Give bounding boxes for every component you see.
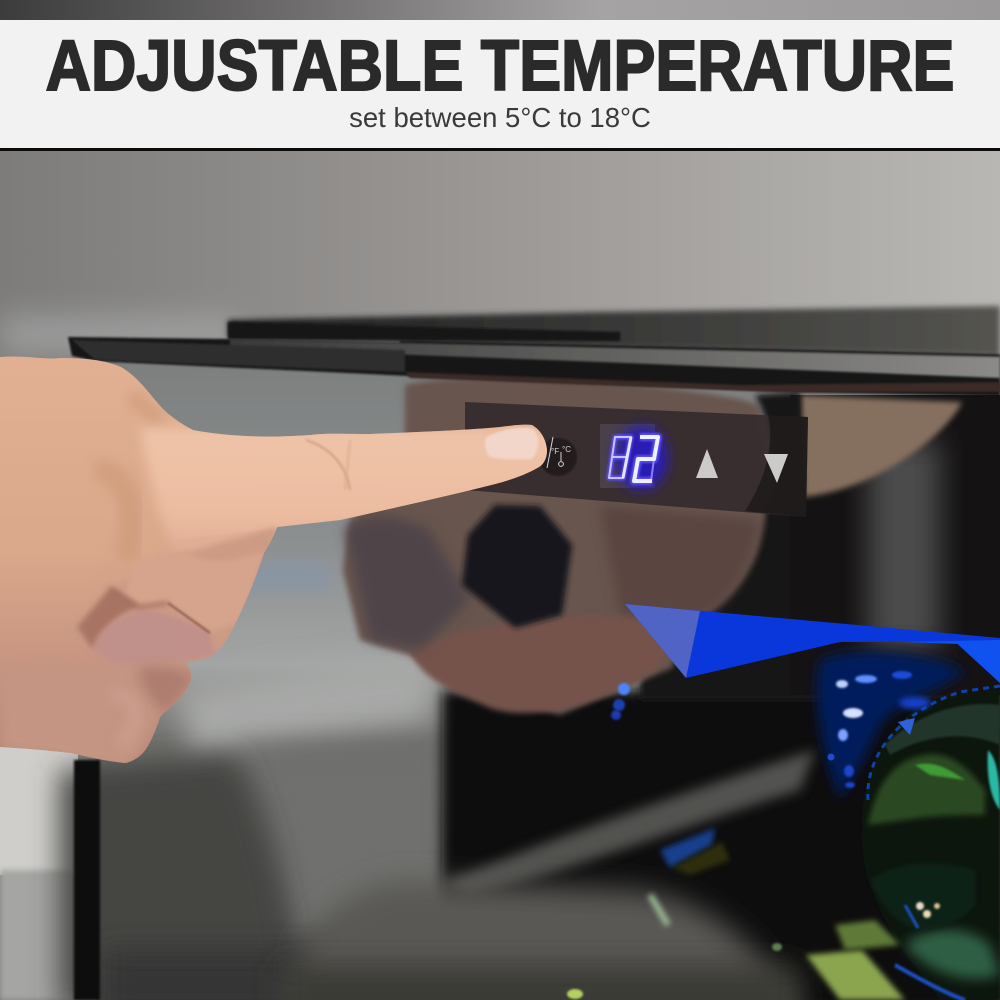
top door trim xyxy=(68,306,1000,396)
palm shadow xyxy=(70,560,110,640)
fingernail xyxy=(485,428,539,459)
subtitle: set between 5°C to 18°C xyxy=(349,102,651,133)
folded fingers xyxy=(77,527,277,668)
up arrow button xyxy=(696,449,718,478)
lower hand and thumb xyxy=(0,701,162,763)
blurred reflection band across bottle area xyxy=(280,750,815,1000)
temperature unit button icon xyxy=(538,437,578,477)
hand pointing at panel xyxy=(0,340,560,770)
temperature unit button icon: °C xyxy=(562,445,571,454)
hand base xyxy=(0,340,560,770)
digit 1 xyxy=(609,437,631,478)
wine bottles and light reflections xyxy=(611,651,1000,1000)
digit 2 xyxy=(634,437,658,481)
dark fridge interior xyxy=(442,395,1000,1000)
fridge glass door xyxy=(60,355,1000,1000)
lower bottle and reflections xyxy=(567,863,1000,1000)
index finger xyxy=(140,424,547,552)
title: ADJUSTABLE TEMPERATURE xyxy=(46,27,954,106)
title banner xyxy=(0,20,1000,151)
blue light strip xyxy=(625,604,1000,683)
left door edge xyxy=(74,760,100,1000)
digital display xyxy=(600,424,668,490)
down arrow button xyxy=(764,454,788,483)
knuckle shading xyxy=(95,470,131,560)
hand reflection in glass xyxy=(343,378,962,715)
control panel xyxy=(465,402,808,517)
top strip xyxy=(0,0,1000,20)
temperature unit button icon: °F xyxy=(551,447,559,456)
